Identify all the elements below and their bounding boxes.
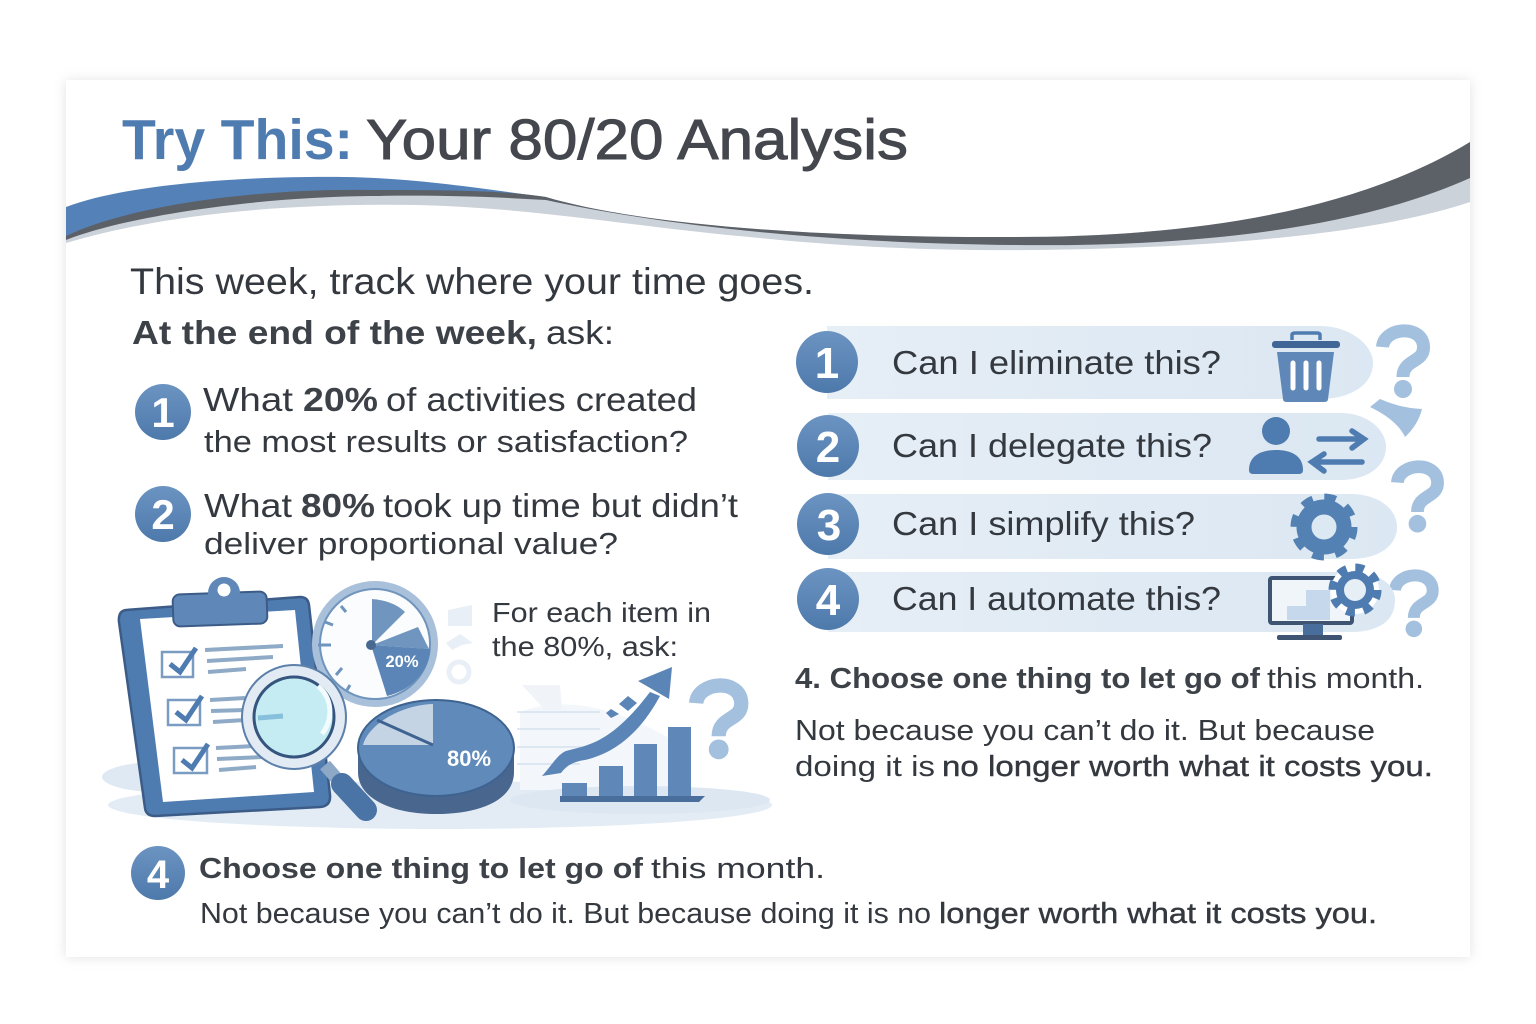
question 2 xyxy=(135,486,738,561)
question 2: What xyxy=(204,487,292,524)
title: Your 80/20 Analysis xyxy=(366,108,908,172)
card background xyxy=(66,80,1470,957)
caption: the 80%, ask: xyxy=(492,631,678,662)
question 1 xyxy=(135,381,697,459)
title: Try This: xyxy=(122,108,353,172)
icon: question mark 3 xyxy=(1397,467,1438,533)
icon: monitor with gear xyxy=(1270,568,1377,640)
illustration: analysis tools xyxy=(102,577,772,829)
icon: question mark fragment xyxy=(1370,399,1422,437)
bottom takeaway xyxy=(131,846,1377,930)
icon: question mark 1 xyxy=(1382,331,1424,398)
right takeaway text: Not because you can’t do it. But because xyxy=(795,715,1375,747)
question 2: 2 xyxy=(151,491,175,538)
ground shadow xyxy=(102,704,772,829)
right takeaway text xyxy=(795,663,1433,783)
icon: gear xyxy=(1296,499,1352,555)
caption: For each item in xyxy=(492,597,711,628)
right takeaway text: this month. xyxy=(1267,663,1424,695)
faded background icons xyxy=(446,605,600,764)
question 1: the most results or satisfaction? xyxy=(204,424,688,459)
clipboard xyxy=(119,577,330,816)
icon: question mark xyxy=(696,685,741,759)
right takeaway text: doing it is xyxy=(795,751,935,783)
option 4: automate: 4 xyxy=(816,576,841,625)
icon: person and swap arrows xyxy=(1249,417,1364,474)
stopwatch gauge: 20% xyxy=(385,653,419,671)
question 2: deliver proportional value? xyxy=(204,526,618,561)
intro line: This week, track where your time goes. xyxy=(130,261,814,302)
prompt line: ask: xyxy=(546,314,614,351)
question 1: of activities created xyxy=(386,381,697,418)
stopwatch gauge xyxy=(312,581,438,707)
bottom takeaway: 4 xyxy=(147,853,170,897)
bottom takeaway: longer worth what it costs you. xyxy=(939,898,1377,930)
magnifying glass xyxy=(242,665,366,810)
bottom takeaway: Choose one thing to let go of xyxy=(199,853,643,885)
icon: trash can xyxy=(1272,333,1340,402)
option 2: delegate: Can I delegate this? xyxy=(892,427,1212,464)
header wave xyxy=(66,142,1470,250)
option 3: simplify: Can I simplify this? xyxy=(892,505,1195,542)
question 2: 80% xyxy=(301,487,375,524)
title xyxy=(122,108,908,172)
option 3: simplify: 3 xyxy=(817,501,841,550)
option 4: automate xyxy=(797,568,1395,640)
option 2: delegate: 2 xyxy=(816,423,840,472)
question 2: took up time but didn’t xyxy=(383,487,738,524)
question 1: 20% xyxy=(303,381,378,418)
option 3: simplify xyxy=(797,493,1397,559)
checklist xyxy=(162,646,283,773)
bottom takeaway: Not because you can’t do it. But because doing it is no xyxy=(200,898,931,930)
option 1: eliminate: 1 xyxy=(815,339,839,388)
growth bar chart xyxy=(510,727,770,814)
prompt line: At the end of the week, xyxy=(132,314,537,351)
pie chart xyxy=(358,700,514,814)
caption xyxy=(492,597,711,662)
option 4: automate: Can I automate this? xyxy=(892,580,1221,617)
option 2: delegate xyxy=(797,413,1386,480)
option 1: eliminate xyxy=(796,326,1373,402)
pie chart: 80% xyxy=(447,746,491,771)
right takeaway text: no longer worth what it costs you. xyxy=(942,751,1433,783)
right takeaway text: 4. Choose one thing to let go of xyxy=(795,663,1260,695)
rising arrow xyxy=(542,667,672,776)
option 1: eliminate: Can I eliminate this? xyxy=(892,344,1221,381)
icon: question mark 4 xyxy=(1395,575,1433,637)
question 1: What xyxy=(203,381,293,418)
question 1: 1 xyxy=(151,389,175,436)
bottom takeaway: this month. xyxy=(651,853,825,885)
